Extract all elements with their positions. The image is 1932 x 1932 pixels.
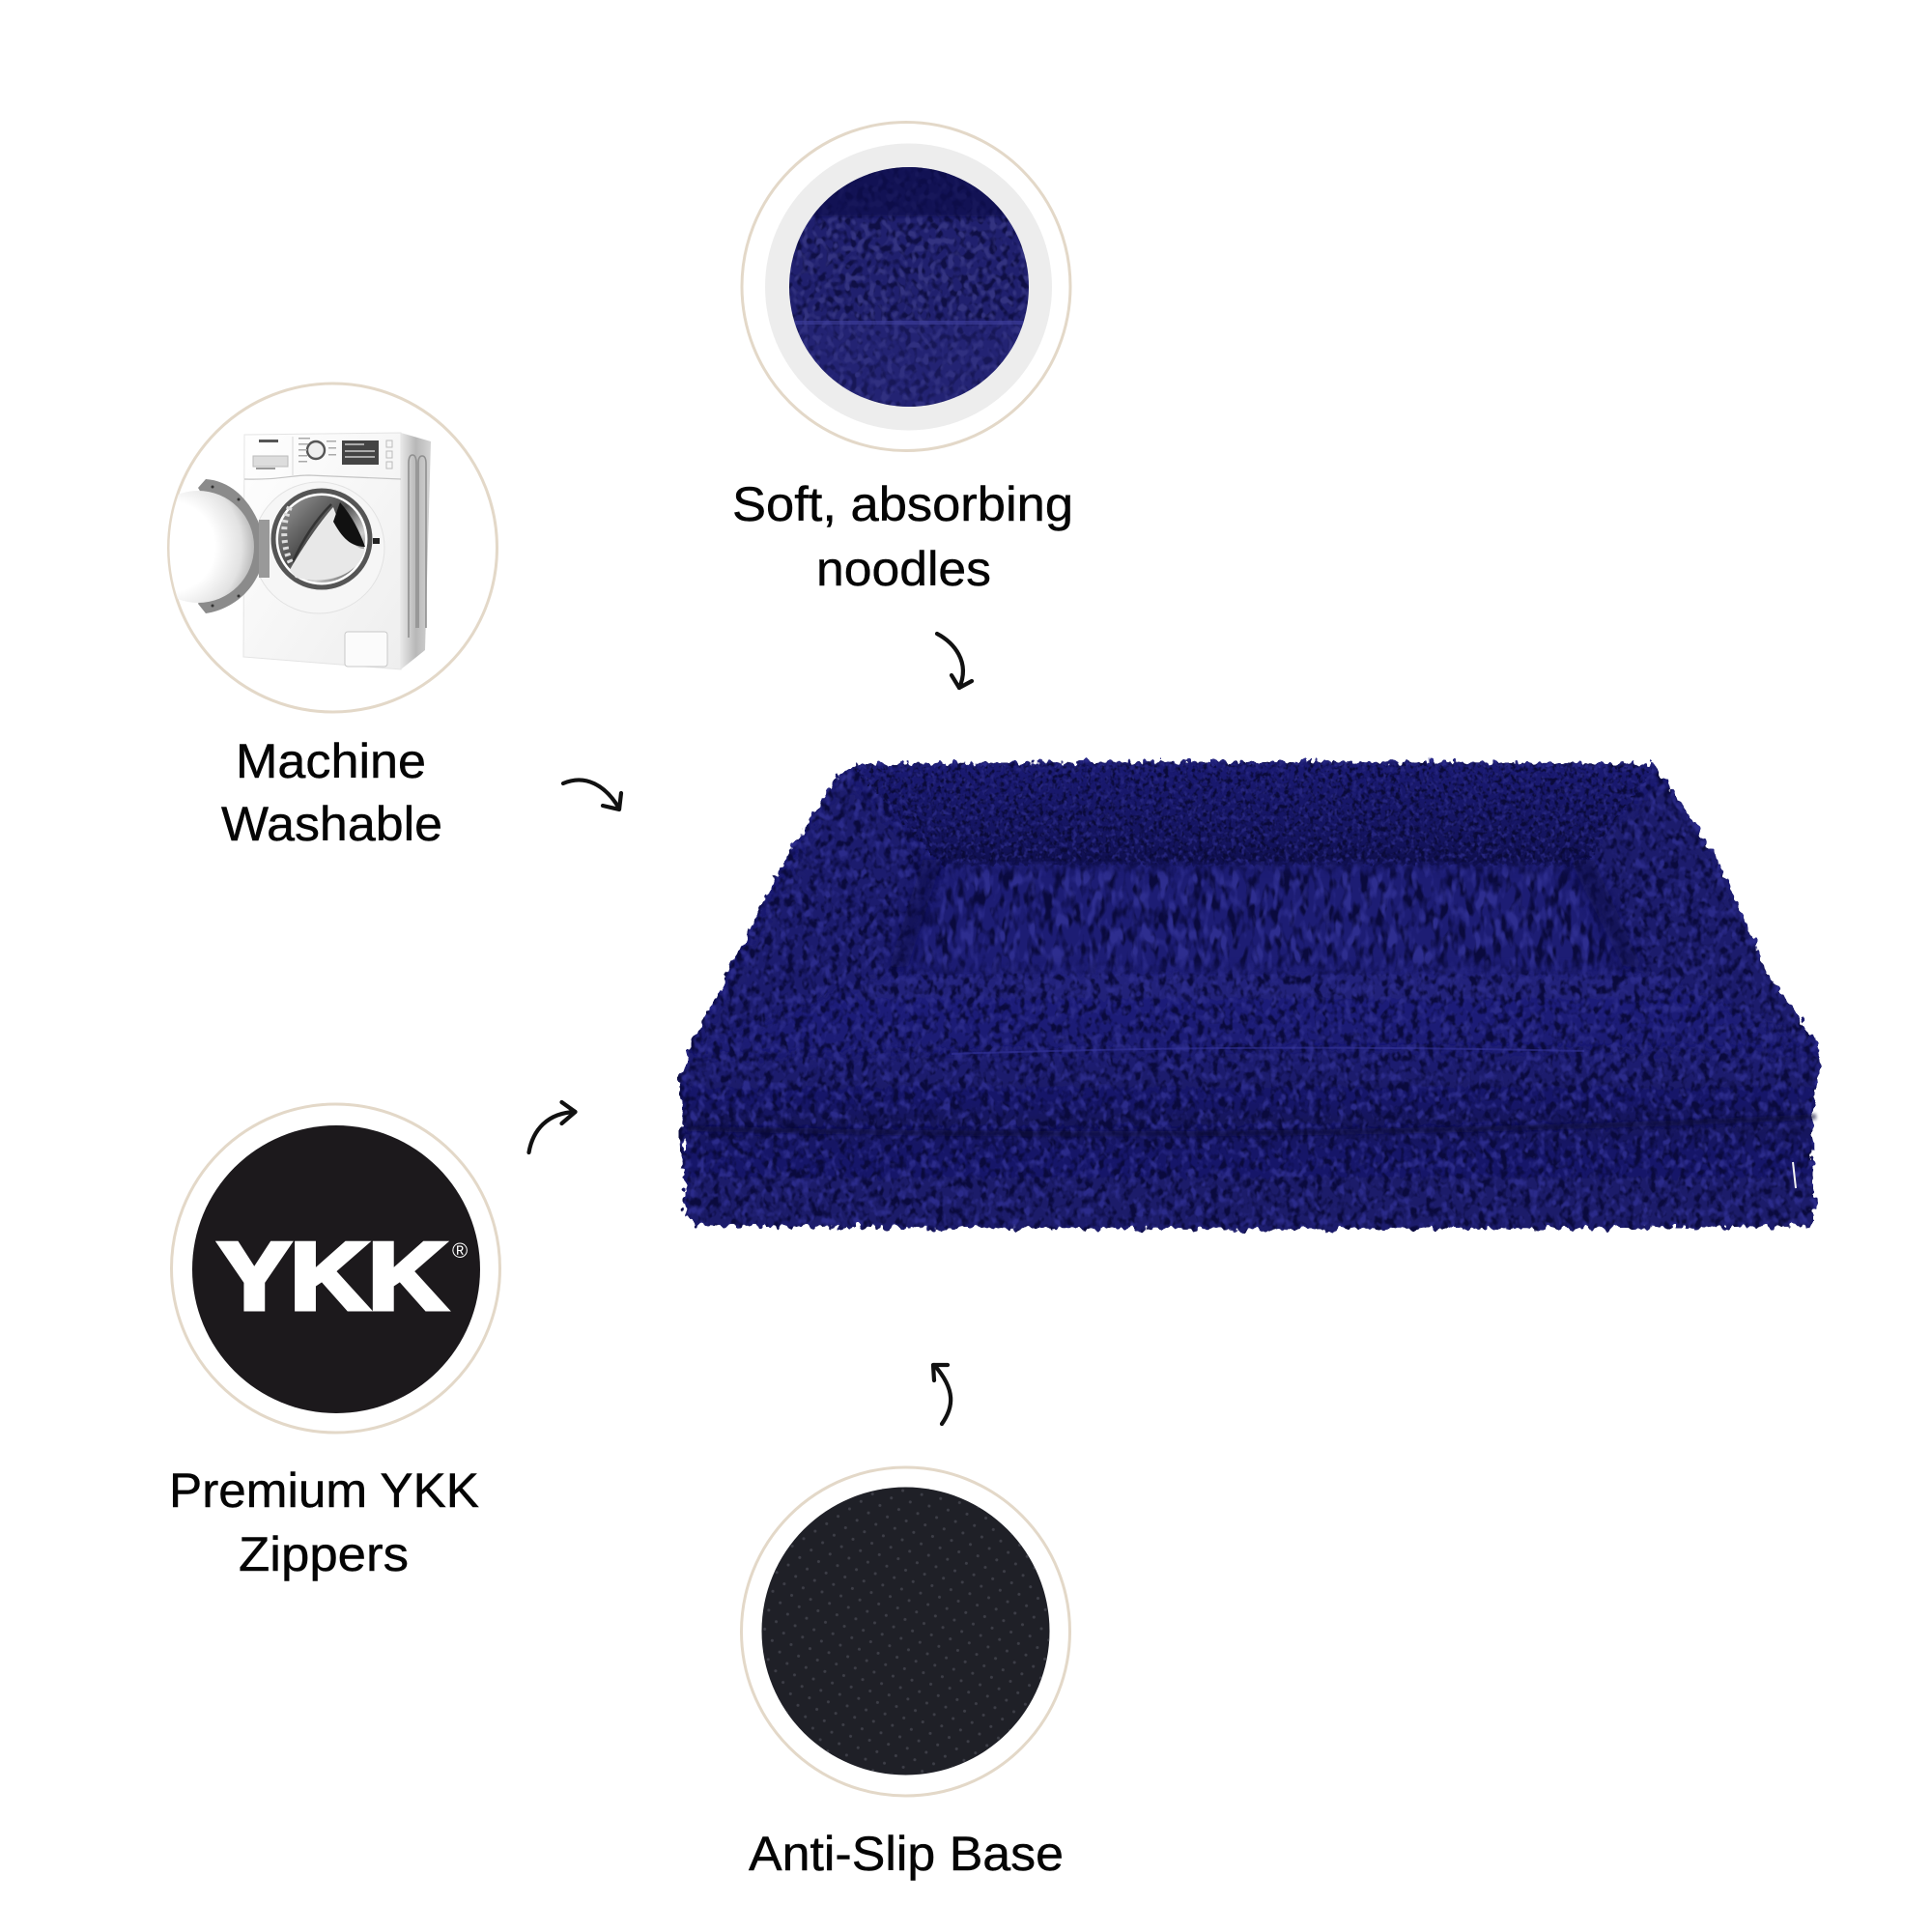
icon: dog bed — [667, 753, 1835, 1236]
heading: Machine — [236, 734, 426, 788]
heading: Anti-Slip Base — [749, 1827, 1064, 1881]
circle outline — [168, 384, 497, 712]
bed body — [667, 753, 1835, 1236]
arrow: washable to bed — [563, 780, 621, 810]
heading: Washable — [221, 797, 442, 851]
arrow: base to bed — [933, 1365, 951, 1424]
icon: YKK logo: ® — [452, 1238, 468, 1263]
noodle close-up — [787, 164, 1038, 412]
heading: Soft, absorbing — [732, 477, 1073, 531]
panel: machine washable — [142, 384, 497, 851]
layer seam — [688, 1117, 1816, 1134]
panel: anti-slip base — [742, 1467, 1070, 1881]
heading — [732, 477, 1073, 596]
front face — [676, 1049, 1826, 1130]
heading: noodles — [816, 542, 991, 596]
dotted rubber texture — [761, 1488, 1049, 1776]
lower layer — [676, 1121, 1826, 1236]
heading — [221, 734, 442, 851]
circle outline — [172, 1104, 500, 1433]
basin shadow — [927, 856, 1584, 867]
left rim — [694, 776, 838, 1036]
heading: Premium YKK — [169, 1463, 479, 1518]
seam highlight — [952, 1048, 1584, 1054]
icon: YKK logo: YKK — [218, 1223, 446, 1329]
heading: Zippers — [239, 1527, 409, 1581]
icon: YKK logo — [192, 1125, 480, 1413]
right rim — [1668, 783, 1818, 1041]
top rim — [855, 765, 1654, 865]
panel: soft absorbing noodles — [732, 122, 1073, 596]
front bolster top — [686, 974, 1818, 1051]
grey ring — [765, 143, 1052, 431]
circle outline — [742, 1467, 1070, 1796]
circle outline — [742, 122, 1070, 450]
arrow: noodles to bed — [937, 634, 972, 688]
inner basin — [903, 867, 1625, 969]
arrow: zippers to bed — [529, 1102, 576, 1152]
panel: premium YKK zippers — [169, 1104, 500, 1581]
basin corners shadow — [889, 860, 1642, 968]
icon: washing machine — [142, 433, 431, 669]
white tag — [1793, 1162, 1796, 1188]
heading — [169, 1463, 479, 1581]
